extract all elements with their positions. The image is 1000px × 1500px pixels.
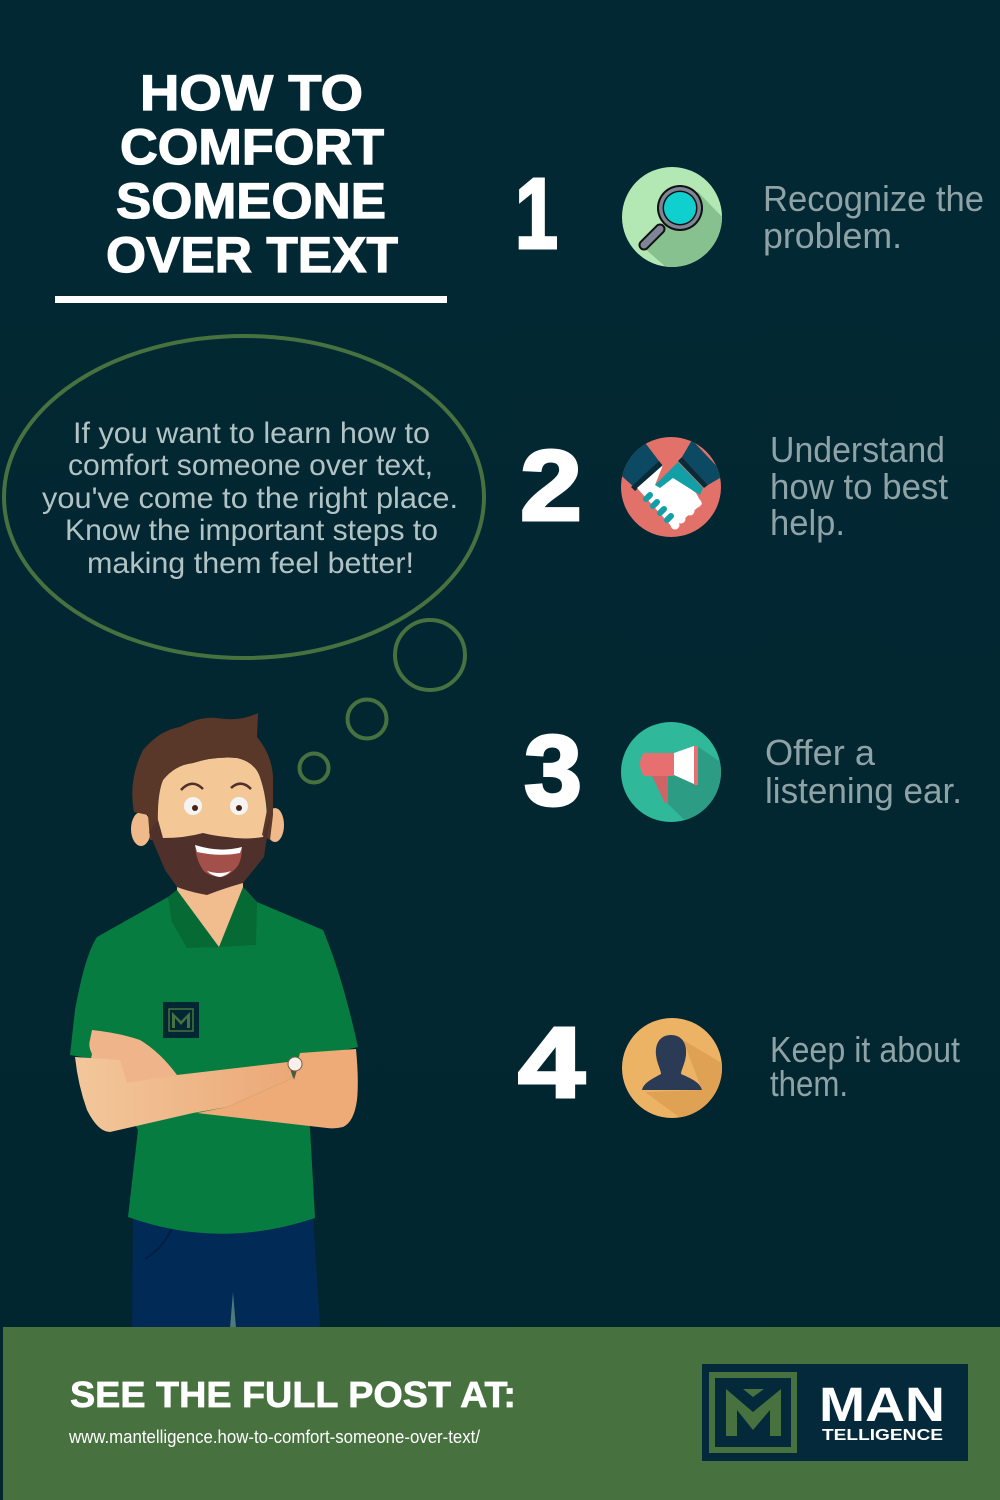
step 2 text	[770, 429, 948, 543]
step 1	[518, 167, 982, 267]
icon: magnifying glass	[622, 167, 722, 267]
character: bearded man with crossed arms	[70, 713, 358, 1328]
icon: megaphone	[621, 722, 721, 822]
trousers	[132, 1215, 320, 1328]
step 3 text: Offer a	[765, 732, 876, 773]
hand	[89, 1030, 177, 1085]
step 4 text: them.	[770, 1063, 848, 1104]
logo	[702, 1364, 968, 1461]
step 4 text	[770, 1029, 960, 1104]
left arm	[75, 1057, 293, 1132]
beard	[149, 817, 270, 895]
footer band	[3, 1327, 1000, 1500]
right arm	[197, 1049, 358, 1128]
thought bubble: Know the important steps to	[65, 514, 438, 547]
footer heading: SEE THE FULL POST AT:	[70, 1374, 516, 1415]
thought bubble: you've come to the right place.	[42, 482, 458, 515]
logo: TELLIGENCE	[822, 1427, 943, 1444]
shirt badge	[163, 1002, 199, 1038]
ears	[131, 808, 284, 846]
step 2 text: help.	[770, 502, 845, 543]
step 1: 1	[515, 158, 558, 270]
icon: handshake	[615, 437, 725, 537]
thought bubble	[4, 336, 484, 782]
step 2	[520, 429, 948, 543]
title: OVER TEXT	[106, 227, 398, 283]
logo: MAN	[819, 1379, 945, 1432]
icon: person silhouette	[622, 1018, 725, 1125]
step 3 text: listening ear.	[765, 770, 962, 811]
step 3 text	[765, 732, 962, 811]
watch	[288, 1057, 302, 1080]
shirt	[70, 887, 358, 1234]
thought bubble: making them feel better!	[87, 547, 414, 580]
hair	[132, 713, 273, 840]
step 2 text: Understand	[770, 429, 945, 470]
step 4	[518, 1018, 960, 1118]
collar	[168, 887, 257, 948]
step 4: 4	[518, 1007, 585, 1119]
face	[155, 758, 267, 860]
step 3	[524, 722, 959, 822]
footer url: www.mantelligence.how-to-comfort-someone-over-text/	[68, 1427, 480, 1447]
step 2 text: how to best	[770, 466, 948, 507]
step 1 text	[763, 178, 984, 256]
neck	[177, 875, 243, 947]
step 3: 3	[524, 715, 582, 827]
title: SOMEONE	[116, 173, 386, 229]
title	[55, 65, 447, 303]
step 4 text: Keep it about	[770, 1029, 960, 1070]
title: COMFORT	[120, 119, 384, 175]
eyes	[181, 784, 251, 815]
step 2: 2	[520, 430, 582, 542]
thought bubble: If you want to learn how to	[73, 417, 430, 450]
step 1 text: problem.	[763, 215, 902, 256]
title: HOW TO	[140, 65, 363, 121]
step 1 text: Recognize the	[763, 178, 984, 219]
mouth	[195, 845, 242, 877]
thought bubble: comfort someone over text,	[68, 449, 433, 482]
